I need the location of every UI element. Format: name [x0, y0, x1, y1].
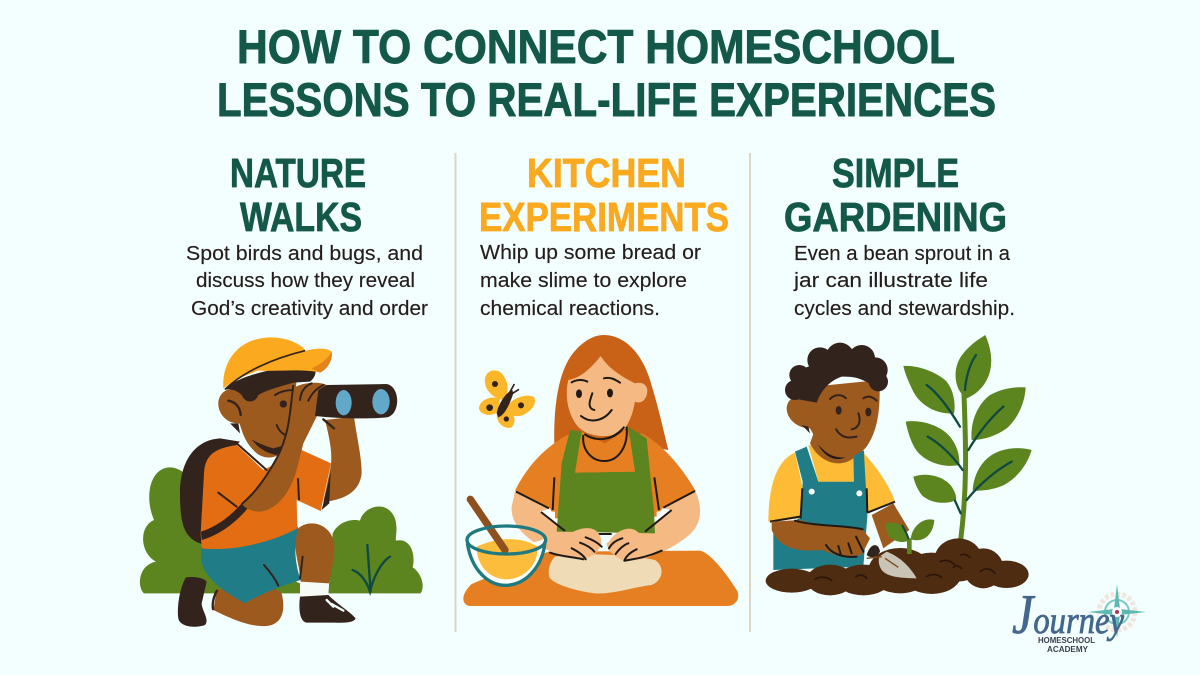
heading: kitchen experiments: EXPERIMENTS: [479, 194, 729, 240]
shirt: [201, 445, 331, 549]
panel: simple gardening: [766, 150, 1032, 595]
icon: binoculars: [315, 384, 397, 418]
text: kitchen experiments description: chemical reactions.: [480, 297, 660, 320]
heading: simple gardening: [784, 150, 1007, 240]
text: nature walks description: Spot birds and bugs, and: [186, 242, 423, 265]
icon: soil: [766, 538, 1029, 595]
text: simple gardening description: cycles and stewardship.: [794, 297, 1015, 320]
logo: Journey Homeschool Academy: ACADEMY: [1047, 645, 1089, 654]
heading: nature walks: WALKS: [240, 194, 362, 240]
apron: [557, 427, 655, 533]
counter: [463, 551, 738, 606]
title: LESSONS TO REAL-LIFE EXPERIENCES: [217, 73, 996, 126]
arms: [512, 492, 602, 560]
hair: [554, 335, 668, 450]
icon: trowel: [879, 552, 917, 578]
hair: [224, 363, 316, 402]
text: simple gardening description: jar can illustrate life: [793, 269, 988, 292]
neck and head: [810, 420, 857, 463]
text: nature walks description: [186, 242, 428, 320]
hair: [785, 343, 888, 403]
far arm: [323, 417, 362, 502]
text: nature walks description: God’s creativity and order: [191, 297, 428, 320]
panel: nature walks: [140, 150, 428, 627]
icon: mixing bowl with spoon: [467, 499, 546, 586]
title: HOW TO CONNECT HOMESCHOOL: [237, 20, 955, 73]
icon: cap: [223, 337, 306, 388]
near arm: [242, 383, 327, 512]
heading: simple gardening: GARDENING: [784, 194, 1007, 240]
title: [217, 20, 996, 126]
text: nature walks description: discuss how they reveal: [196, 269, 415, 292]
head: [567, 356, 647, 436]
logo: Journey Homeschool Academy: Journey: [1012, 584, 1124, 646]
knee: [213, 580, 283, 626]
far leg and shoe: [178, 577, 207, 627]
overalls: [773, 447, 867, 570]
text: kitchen experiments description: make slime to explore: [480, 269, 687, 292]
heading: nature walks: [230, 150, 366, 240]
dough: [549, 554, 662, 594]
text: simple gardening description: Even a bean sprout in a: [794, 242, 1011, 265]
icon: sprout: [886, 519, 934, 554]
icon: compass: [1088, 584, 1146, 638]
shirt: [768, 453, 803, 522]
logo: Journey Homeschool Academy: HOMESCHOOL: [1038, 636, 1095, 645]
shirt: [515, 433, 696, 518]
heading: kitchen experiments: [479, 150, 729, 240]
icon: backpack: [180, 438, 240, 544]
text: kitchen experiments description: [480, 241, 701, 320]
icon: bushes: [140, 467, 423, 593]
hands: [550, 528, 601, 559]
arms: [772, 520, 870, 557]
heading: simple gardening: SIMPLE: [832, 150, 959, 196]
icon: plant: [903, 335, 1032, 540]
illustration: child kneading dough: [463, 335, 738, 606]
shorts: [201, 527, 301, 603]
icon: butterfly: [479, 370, 535, 428]
heading: nature walks: NATURE: [230, 150, 366, 196]
heading: kitchen experiments: KITCHEN: [527, 150, 686, 196]
illustration: child planting: [766, 335, 1032, 595]
text: simple gardening description: [793, 242, 1015, 320]
panel: kitchen experiments: [463, 150, 738, 606]
text: kitchen experiments description: Whip up some bread or: [480, 241, 701, 264]
head: [218, 380, 297, 458]
illustration: child with binoculars: [140, 337, 423, 627]
